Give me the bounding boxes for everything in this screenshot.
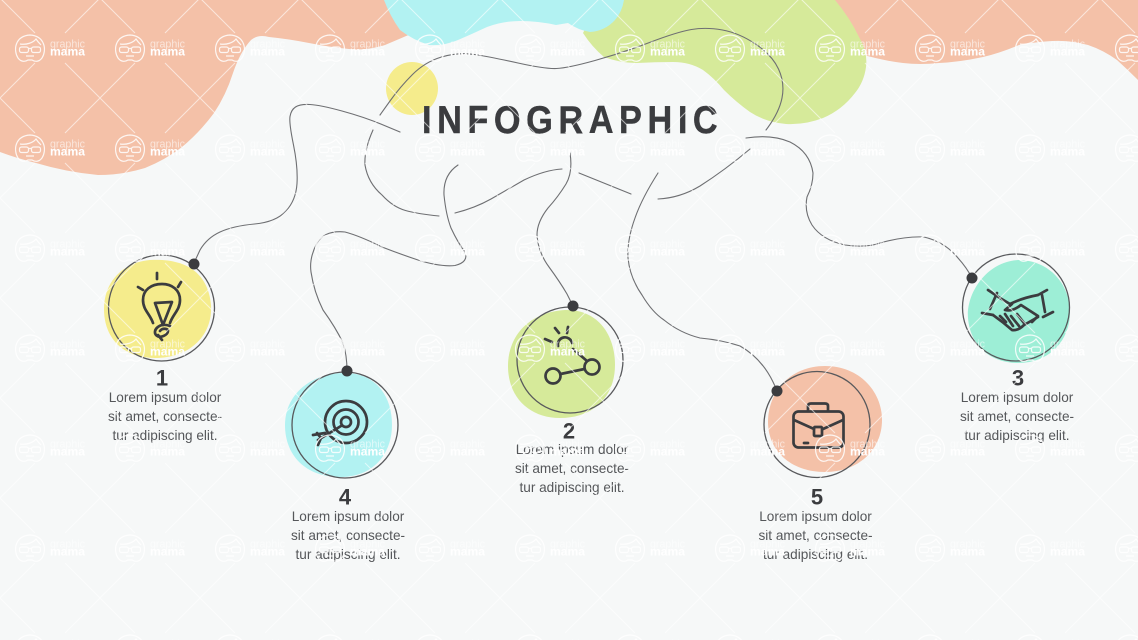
icon: target [313,401,367,445]
blob: cyan [285,373,392,477]
number: 2 [563,418,575,444]
node dot [568,300,578,312]
text block [291,509,405,562]
node dot [188,258,200,270]
number: 3 [1012,366,1024,390]
number: 1 [156,366,168,390]
ring [108,255,214,361]
text block: Lorem ipsum dolor [516,442,629,457]
node dot [772,386,782,396]
text block: sit amet, consecte- [108,409,222,424]
panel: item 2 [508,300,629,495]
text block: sit amet, consecte- [758,528,873,543]
ring [764,372,870,478]
panel: item 3 [960,254,1074,443]
title: INFOGRAPHIC [422,98,718,141]
panel: item 5 [758,366,882,562]
text block: tur adipiscing elit. [964,428,1070,443]
background blob: green [583,0,866,124]
node dot [966,272,978,284]
text block: sit amet, consecte- [291,528,405,543]
icon: briefcase [794,404,844,448]
text block [515,442,629,495]
background blob: cyan [384,0,624,45]
panel: item 1 [104,255,222,443]
text block: sit amet, consecte- [960,409,1074,424]
text block: Lorem ipsum dolor [961,390,1074,405]
number: 4 [339,484,352,510]
node dot [342,366,352,376]
blob: peach [768,366,882,472]
blob: yellow [104,260,211,358]
ring [962,254,1070,361]
ring [292,372,398,478]
icon: handshake [982,290,1053,330]
ring [517,307,623,413]
text block: Lorem ipsum dolor [292,509,405,524]
text block: tur adipiscing elit. [112,428,218,443]
blob: green [508,310,615,418]
connector lines [194,28,972,391]
background blob: peach left [0,0,420,175]
text block: Lorem ipsum dolor [109,390,222,405]
panel: item 4 [285,366,405,562]
text block: tur adipiscing elit. [519,480,625,495]
icon: light bulb [138,273,181,340]
text block [108,390,222,443]
text block: tur adipiscing elit. [295,547,401,562]
text block [960,390,1074,443]
blob: mint [968,260,1070,363]
background circle: yellow [386,62,438,115]
text block [758,509,873,562]
text block: Lorem ipsum dolor [759,509,872,524]
icon: network nodes [545,327,600,384]
text block: tur adipiscing elit. [763,547,868,562]
number: 5 [811,484,823,510]
text block: sit amet, consecte- [515,461,629,476]
background blob: peach right [830,0,1138,80]
